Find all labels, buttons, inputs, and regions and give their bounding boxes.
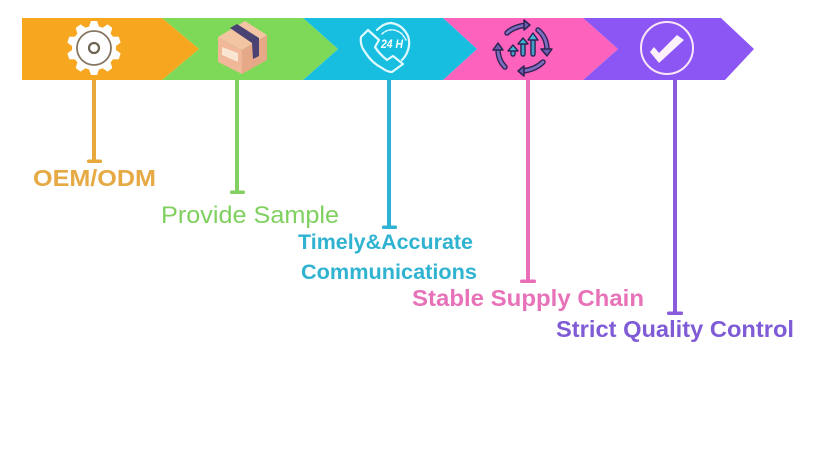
segment: pink arrow xyxy=(443,18,618,80)
label: Strict Quality Control: Strict Quality Control xyxy=(556,316,794,342)
icon: gear xyxy=(67,21,121,75)
connector: blue xyxy=(382,80,397,229)
icon: circular arrows with up arrows xyxy=(493,20,552,76)
label: Timely&Accurate Communications xyxy=(298,231,477,284)
arrow band xyxy=(22,18,754,80)
icon: 24h phone xyxy=(361,23,409,72)
label: Provide Sample: Provide Sample xyxy=(161,202,339,229)
segment: blue arrow xyxy=(303,18,477,80)
segment: purple arrow xyxy=(583,18,754,80)
connector: purple xyxy=(667,80,683,315)
icon: box xyxy=(218,21,267,74)
connector: green xyxy=(230,80,245,194)
label: OEM/ODM: OEM/ODM xyxy=(33,165,156,191)
connector: pink xyxy=(520,80,536,283)
icon: 24h phone: 24 H xyxy=(380,37,403,51)
label: Stable Supply Chain: Stable Supply Chain xyxy=(412,285,644,311)
connector: orange xyxy=(87,80,102,163)
icon: check circle xyxy=(641,22,693,74)
label: Timely&Accurate Communications: Timely&Accurate xyxy=(298,231,473,254)
segment: green arrow xyxy=(162,18,338,80)
label: Timely&Accurate Communications: Communications xyxy=(301,261,477,284)
segment: orange arrow xyxy=(22,18,199,80)
